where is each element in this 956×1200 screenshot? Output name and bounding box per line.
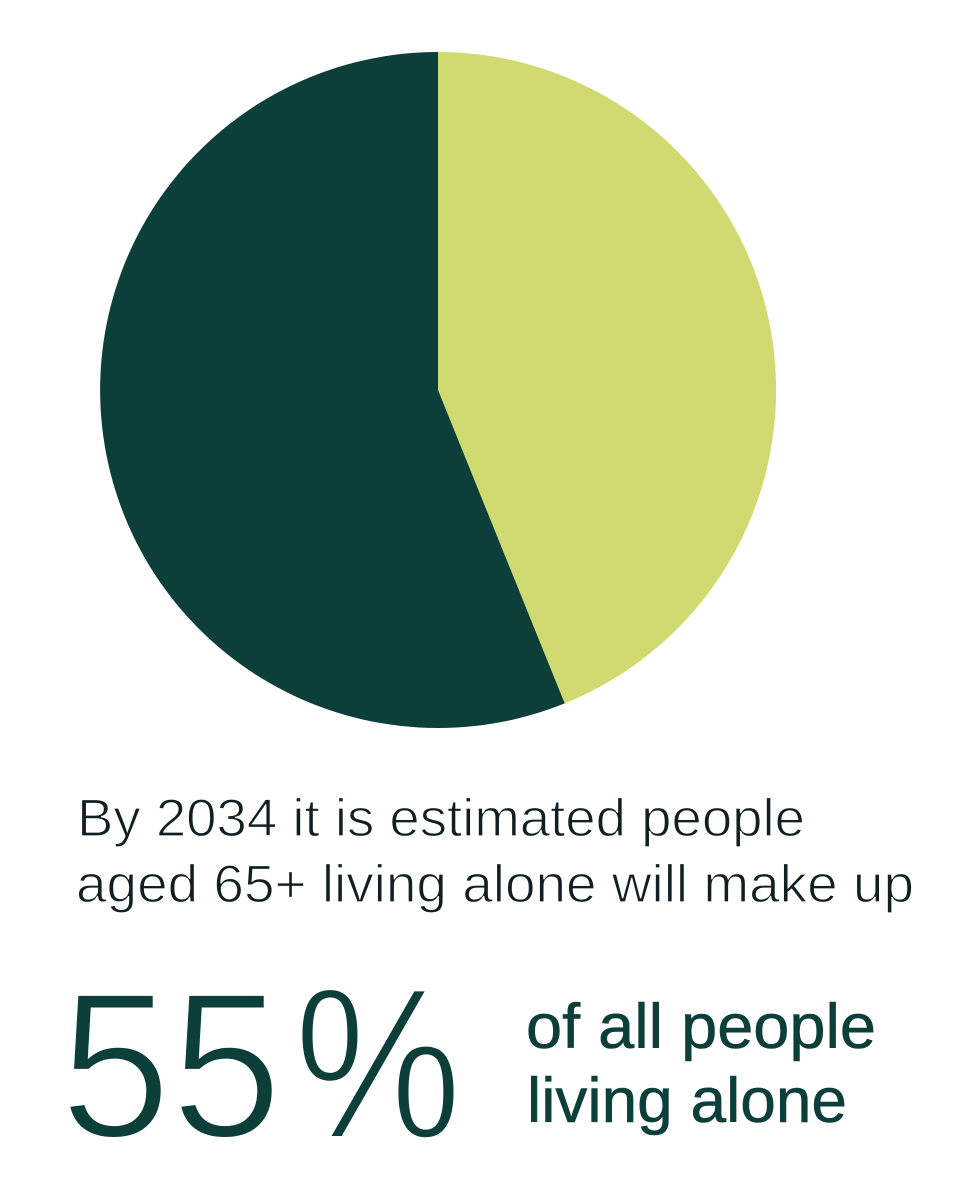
description text (76, 789, 914, 914)
pie chart (100, 52, 776, 728)
big statistic: % (294, 942, 462, 1184)
statistic caption (526, 992, 876, 1136)
statistic caption: living alone (527, 1066, 847, 1136)
pie slice: remaining 45% (438, 52, 776, 703)
big statistic: 55 (60, 950, 282, 1182)
big statistic (60, 942, 462, 1184)
statistic caption: of all people (526, 992, 876, 1062)
description text: By 2034 it is estimated people (77, 789, 805, 848)
pie slice: 55% aged 65+ (100, 52, 565, 728)
description text: aged 65+ living alone will make up (76, 855, 914, 914)
